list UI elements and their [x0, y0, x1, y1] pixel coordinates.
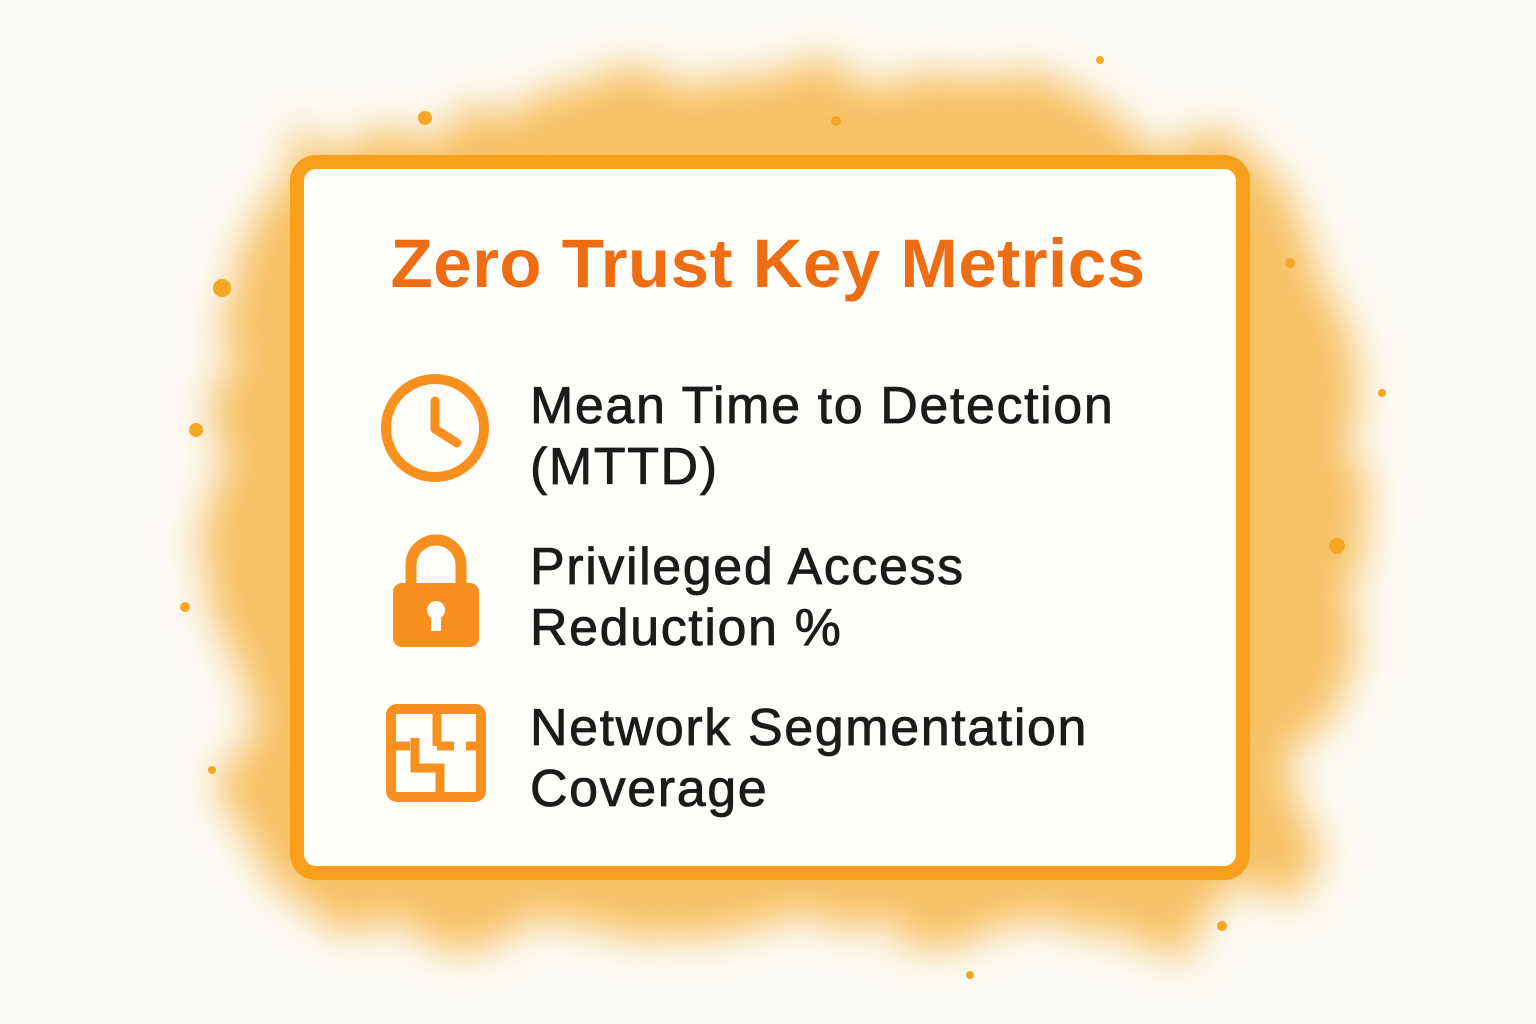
icon: network segmentation	[386, 704, 486, 802]
title: Zero Trust Key Metrics	[391, 225, 1145, 302]
text: MTTD: Mean Time to Detection	[530, 377, 1114, 435]
text: network segmentation: Coverage	[530, 760, 768, 818]
icon: lock	[393, 534, 479, 647]
text: network segmentation: Network Segmentation	[530, 699, 1088, 757]
text: privileged access	[530, 538, 965, 657]
text: privileged access: Privileged Access	[530, 538, 965, 596]
icon: clock	[381, 374, 489, 482]
text: MTTD	[530, 377, 1114, 496]
text: MTTD: (MTTD)	[530, 438, 719, 496]
text: privileged access: Reduction %	[530, 599, 842, 657]
panel: metrics card	[290, 155, 1250, 880]
text: network segmentation	[530, 699, 1088, 818]
